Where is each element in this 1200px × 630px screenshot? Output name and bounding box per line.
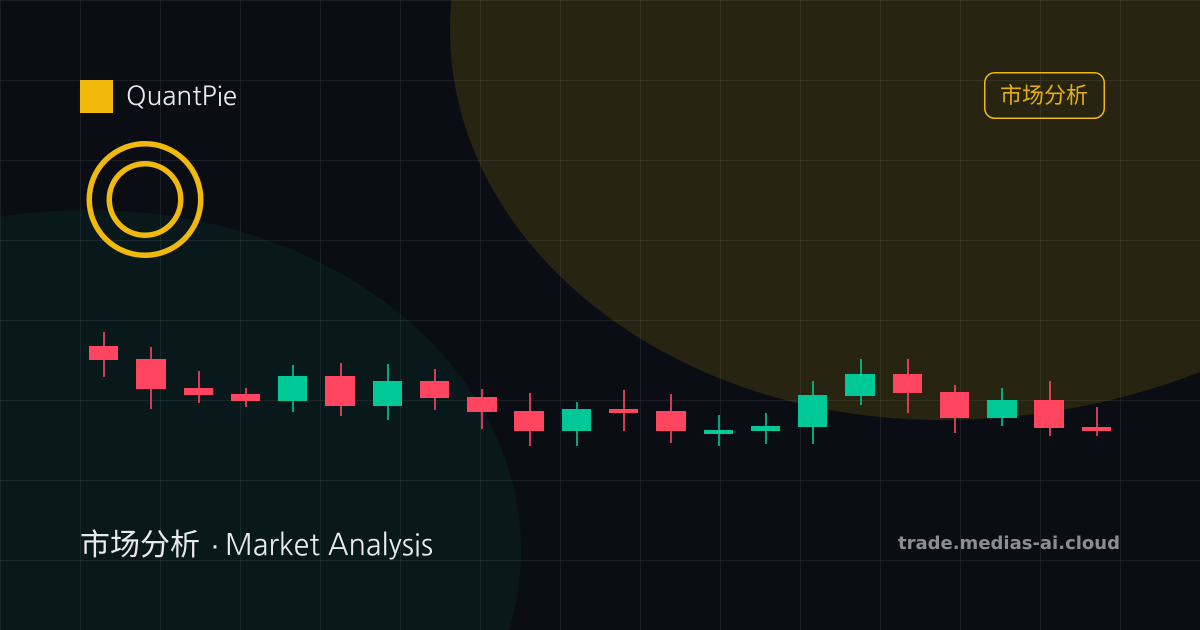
brand logo [80,80,237,113]
title [80,529,433,562]
title: · [210,529,220,562]
badge: market analysis: 市场分析 [1000,83,1088,108]
icon: logo square [80,80,113,113]
title: Market Analysis [225,530,433,560]
gold background blob [450,0,1200,420]
title: 市场分析 [80,529,200,562]
brand name: QuantPie [126,83,237,109]
footer url: trade.medias-ai.cloud [898,533,1120,554]
candlestick chart [89,332,1111,446]
teal background blob [0,210,521,630]
badge: market analysis [985,73,1104,118]
icon: concentric rings [89,144,201,255]
